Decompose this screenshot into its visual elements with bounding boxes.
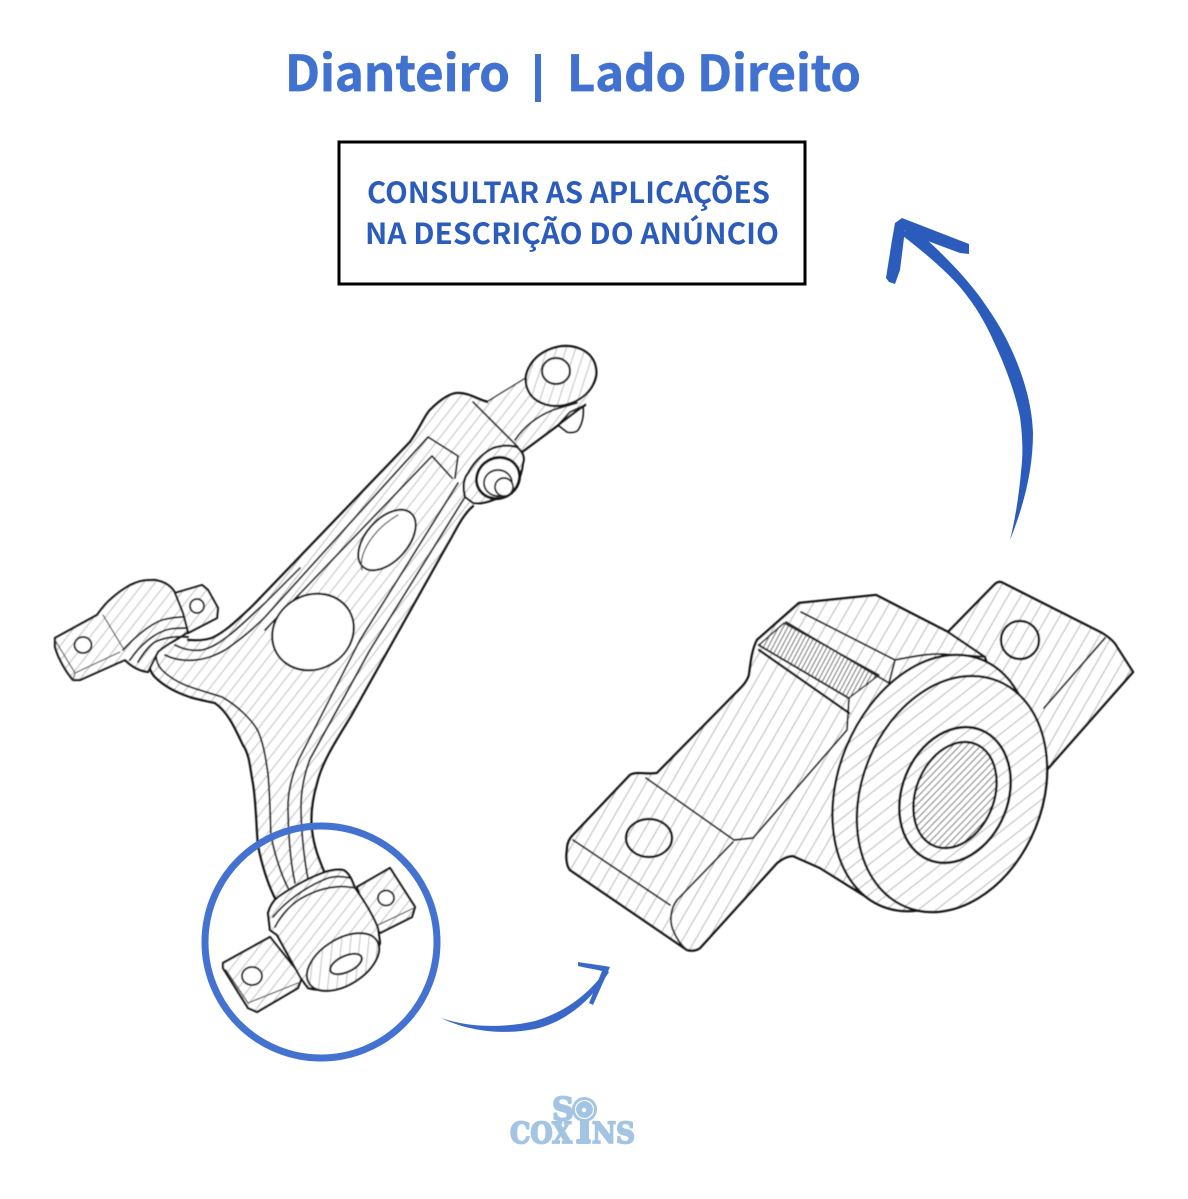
- bushing ring: [880, 710, 1030, 880]
- title: Dianteiro: [285, 35, 510, 106]
- logo: stylised O and I: [572, 1097, 597, 1144]
- logo: Só Coxins: S: [552, 1090, 574, 1128]
- disc rear rim: [796, 625, 1068, 941]
- highlight circle around lower bushing: [205, 826, 437, 1058]
- ball joint end: [473, 336, 605, 452]
- arm hole small: [347, 499, 427, 581]
- arrow: small curved arrow to enlarged bushing: [441, 962, 610, 1032]
- title: [285, 35, 861, 106]
- callout box: consult applications: CONSULTAR AS APLICAÇÕES: [367, 170, 770, 212]
- logo: Só Coxins: [510, 1090, 635, 1150]
- main body: [566, 595, 1000, 951]
- arm body: [148, 378, 550, 902]
- dark groove band: [759, 623, 879, 698]
- callout box: consult applications: [339, 142, 805, 284]
- callout box: consult applications: NA DESCRIÇÃO DO ANÚNCIO: [365, 211, 779, 253]
- disc front face: [823, 647, 1081, 941]
- title: Lado Direito: [567, 35, 861, 106]
- logo: Só Coxins: NS: [592, 1116, 635, 1150]
- front bolt hole: [626, 819, 672, 857]
- back plate bolt hole: [1001, 621, 1039, 659]
- left bushing: [55, 580, 218, 680]
- bottom bushing: [223, 868, 415, 1012]
- bushing bore: [898, 729, 1012, 861]
- arrow: large curved arrow pointing up to callout: [886, 218, 1033, 540]
- arm hole large: [258, 579, 368, 685]
- back mounting plate: [948, 582, 1133, 773]
- enlarged bushing illustration: [566, 582, 1133, 951]
- knuckle bushing: [464, 446, 527, 506]
- control arm illustration: [55, 336, 605, 1012]
- arm inner ribs: [156, 648, 288, 888]
- logo: Só Coxins: COX: [510, 1116, 572, 1150]
